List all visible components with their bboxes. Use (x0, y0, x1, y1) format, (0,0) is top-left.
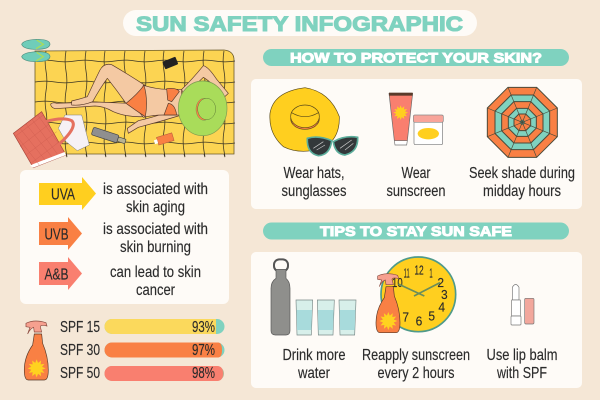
bar: SPF 15: 93% (192, 319, 215, 336)
caption: hats (282, 165, 346, 200)
icon: clock and spray bottle (376, 257, 456, 333)
text: A&B: can lead to skin (110, 264, 201, 281)
caption: reapply: Reapply sunscreen (362, 347, 470, 364)
bar: SPF 30: SPF 30 (60, 342, 100, 359)
chart: SPF protection bars (60, 319, 224, 382)
caption: sunscreen: sunscreen (386, 183, 446, 200)
bar: SPF 50 (60, 365, 224, 382)
woman (51, 64, 228, 133)
arrow: UVB: UVB (44, 226, 68, 244)
icon: clock and spray bottle: 5 (428, 309, 435, 324)
heading: tips to stay sun safe (263, 222, 569, 240)
text: UVA (103, 181, 208, 216)
arrow: UVA: UVA (51, 186, 75, 204)
arrow: UVA (39, 177, 96, 210)
text: UVB: is associated with (103, 221, 208, 238)
arrow: A&B (39, 257, 82, 290)
caption: shade (469, 165, 575, 200)
text: A&B: cancer (136, 282, 176, 299)
icon: yellow hat and sunglasses (270, 88, 358, 156)
text: UVA: is associated with (103, 181, 208, 198)
bottle on towel (91, 127, 127, 145)
towel (35, 50, 235, 157)
bar: SPF 50: SPF 50 (60, 365, 100, 382)
icon: beach umbrella (487, 87, 557, 157)
caption: lip balm: with SPF (496, 365, 547, 382)
icon: clock and spray bottle: 3 (441, 287, 448, 302)
flip-flops (22, 39, 50, 62)
sunscreen tube on towel (153, 133, 174, 146)
caption: hats: sunglasses (282, 183, 346, 200)
icon: lip balm (511, 284, 534, 325)
title: SUN SAFETY INFOGRAPHIC (136, 12, 463, 36)
icon: clock and spray bottle: 12 (414, 263, 424, 278)
caption: lip balm: Use lip balm (486, 347, 558, 364)
caption: water: water (297, 365, 331, 382)
arrow: A&B: A&B (44, 266, 68, 284)
icon: clock and spray bottle: 4 (438, 299, 446, 314)
heading: how to protect your skin (263, 49, 569, 66)
caption: water (282, 347, 346, 382)
panel: tips (251, 252, 582, 388)
towel folded (58, 115, 89, 151)
caption: sunscreen (386, 165, 446, 200)
text: UVA: skin aging (126, 199, 185, 216)
caption: reapply: every 2 hours (378, 365, 454, 382)
panel: how to protect (251, 79, 582, 209)
text: UVB: skin burning (120, 239, 191, 256)
beach bag (13, 112, 73, 168)
text: UVB (103, 221, 208, 256)
icon: spray bottle (24, 321, 48, 380)
heading: how to protect your skin: HOW TO PROTECT YOUR SKIN? (290, 50, 542, 66)
bar: SPF 15 (60, 319, 224, 336)
icon: clock and spray bottle: 10 (392, 275, 403, 290)
caption: reapply (362, 347, 470, 382)
caption: shade: Seek shade during (469, 165, 575, 182)
phone (162, 57, 178, 69)
caption: water: Drink more (282, 347, 346, 364)
bar: SPF 15: SPF 15 (60, 319, 100, 336)
icon: clock and spray bottle: 6 (416, 313, 422, 328)
bar: SPF 50: 98% (192, 365, 215, 382)
icon: water bottle and glasses (271, 259, 356, 335)
illustration: woman sunbathing on towel (13, 39, 235, 168)
icon: sunscreen tube and jar (389, 93, 443, 145)
icon: clock and spray bottle: 1 (429, 265, 433, 280)
caption: hats: Wear hats, (284, 165, 344, 182)
sun hat (178, 81, 227, 136)
bar: SPF 30: 97% (192, 342, 215, 359)
heading: tips to stay sun safe: TIPS TO STAY SUN SAFE (320, 224, 512, 239)
icon: clock and spray bottle: 2 (437, 275, 444, 290)
arrow: UVB (39, 217, 82, 250)
icon: clock and spray bottle: 7 (402, 309, 409, 324)
panel: UV types (20, 170, 229, 304)
caption: shade: midday hours (483, 183, 561, 200)
icon: clock and spray bottle: 11 (404, 265, 410, 280)
caption: sunscreen: Wear (402, 165, 431, 182)
bar: SPF 30 (60, 342, 224, 359)
text: A&B (110, 264, 201, 299)
caption: lip balm (486, 347, 558, 382)
